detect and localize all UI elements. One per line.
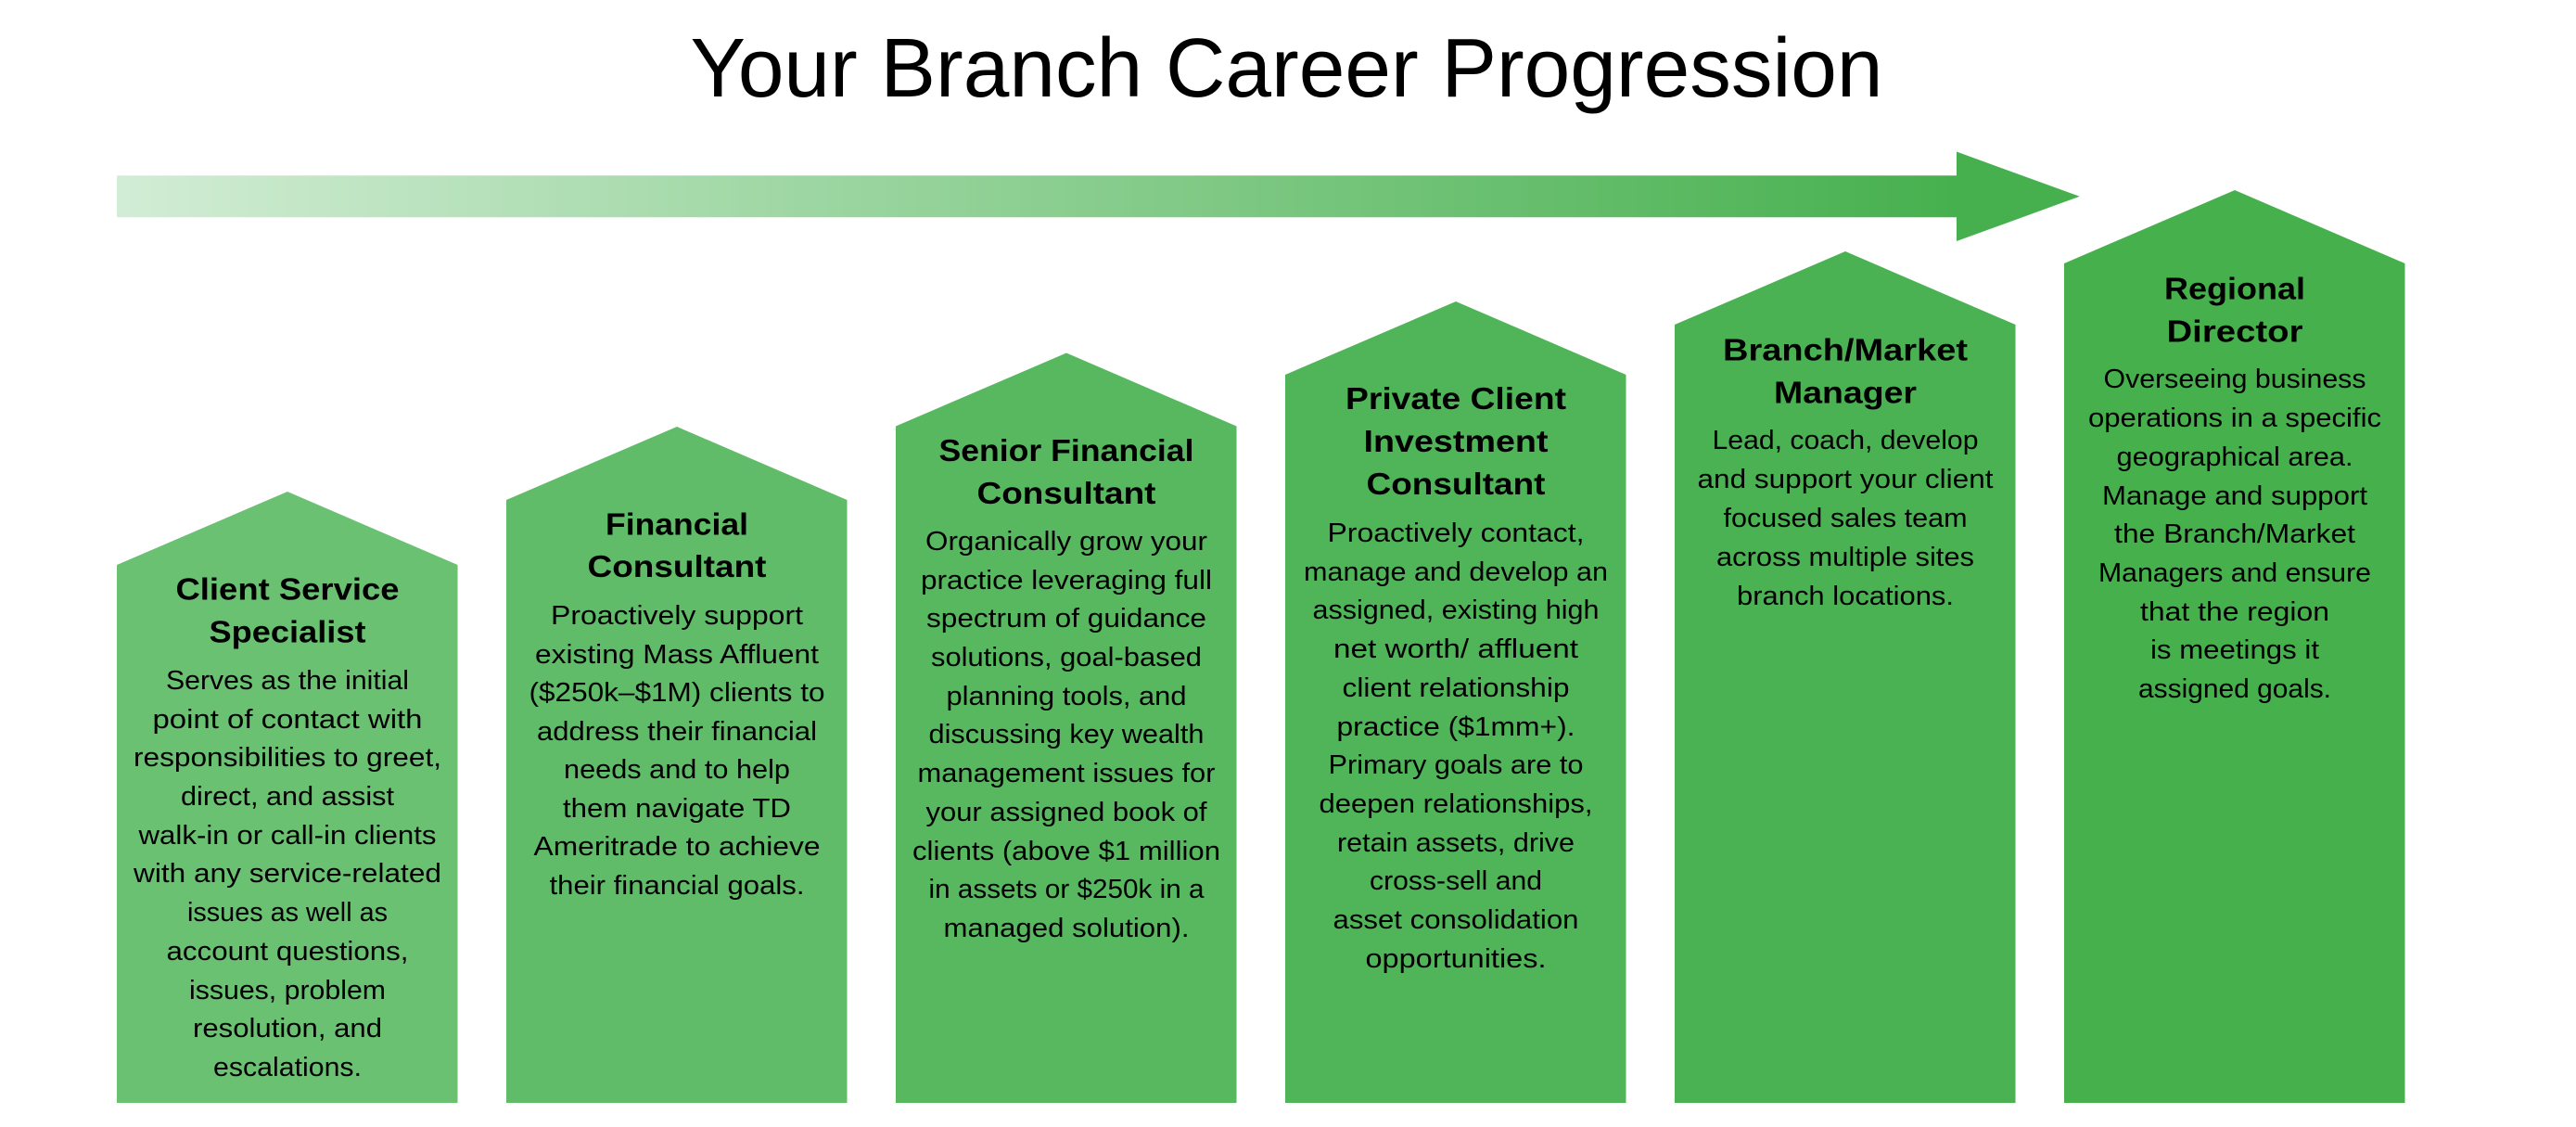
description: Proactively support (551, 601, 803, 631)
heading: Senior Financial (938, 433, 1194, 467)
heading: Investment (1363, 424, 1549, 458)
description: Managers and ensure (2098, 558, 2371, 588)
card shape (117, 492, 458, 1103)
description: Serves as the initial (166, 666, 409, 696)
description: spectrum of guidance (926, 604, 1206, 634)
description: operations in a specific (2088, 403, 2381, 433)
description: with any service-related (133, 859, 441, 889)
panel: Senior Financial Consultant (896, 352, 1237, 1103)
card shape (1285, 301, 1626, 1103)
description: Lead, coach, develop (1712, 426, 1979, 455)
card shape (506, 427, 848, 1103)
description: needs and to help (564, 755, 790, 785)
description: in assets or $250k in a (929, 875, 1205, 904)
heading: Regional (2164, 271, 2305, 306)
description: Primary goals are to (1328, 750, 1584, 780)
heading: Consultant (977, 476, 1155, 510)
card shape (1675, 251, 2016, 1103)
description (2088, 365, 2381, 704)
description: asset consolidation (1333, 905, 1578, 935)
description: Proactively contact, (1328, 519, 1584, 548)
description (133, 666, 441, 1082)
description: retain assets, drive (1337, 828, 1575, 858)
panel: Financial Consultant (506, 427, 848, 1103)
heading (2164, 271, 2305, 349)
card shape (2064, 190, 2405, 1103)
description: across multiple sites (1716, 543, 1974, 572)
description: existing Mass Affluent (535, 640, 819, 670)
description: point of contact with (152, 705, 423, 735)
heading (1345, 381, 1566, 501)
card shape (896, 352, 1237, 1103)
heading: Client Service (176, 571, 399, 607)
description: discussing key wealth (929, 720, 1204, 749)
description: escalations. (213, 1053, 362, 1082)
heading: Manager (1774, 375, 1917, 410)
description: ($250k–$1M) clients to (529, 678, 825, 708)
heading (588, 506, 766, 583)
description: responsibilities to greet, (134, 743, 441, 773)
heading: Financial (606, 506, 748, 542)
heading: Consultant (588, 549, 766, 583)
description: issues, problem (189, 976, 386, 1005)
description: them navigate TD (563, 794, 791, 824)
description: issues as well as (187, 898, 388, 928)
description: their financial goals. (549, 871, 805, 901)
description: the Branch/Market (2114, 519, 2355, 549)
heading (938, 433, 1194, 510)
heading: Branch/Market (1723, 332, 1968, 367)
description: direct, and assist (181, 782, 394, 812)
description: planning tools, and (946, 682, 1187, 711)
description: focused sales team (1723, 504, 1968, 533)
description: address their financial (537, 717, 817, 747)
arrow: career progression direction (117, 152, 2080, 241)
description: walk-in or call-in clients (137, 821, 437, 851)
description: that the region (2140, 597, 2329, 627)
description: is meetings it (2150, 635, 2319, 665)
heading (176, 571, 399, 649)
description: solutions, goal-based (931, 643, 1202, 672)
description: Ameritrade to achieve (534, 832, 820, 862)
description: and support your client (1697, 465, 1994, 494)
description: management issues for (918, 759, 1216, 788)
description: account questions, (167, 937, 408, 967)
description: managed solution). (944, 914, 1189, 943)
description: Overseeing business (2103, 365, 2366, 394)
description: Organically grow your (925, 527, 1207, 557)
heading: Private Client (1345, 381, 1566, 416)
description: cross-sell and (1370, 866, 1542, 896)
description (1697, 426, 1994, 611)
heading: Specialist (210, 614, 366, 649)
description: manage and develop an (1304, 557, 1608, 587)
heading (1723, 332, 1968, 410)
panel: Regional Director (2064, 190, 2405, 1103)
heading: Consultant (1367, 467, 1545, 501)
description: geographical area. (2116, 442, 2353, 472)
description: Manage and support (2102, 481, 2367, 511)
panel: Private Client Investment Consultant (1285, 301, 1626, 1103)
description (1304, 519, 1608, 974)
description: assigned goals. (2138, 674, 2331, 704)
description: clients (above $1 million (912, 837, 1220, 866)
heading: Director (2166, 314, 2303, 349)
description: your assigned book of (925, 798, 1207, 827)
description: net worth/ affluent (1333, 634, 1578, 664)
panel: Client Service Specialist (117, 492, 458, 1103)
description: branch locations. (1737, 582, 1954, 611)
description (529, 601, 825, 901)
description: resolution, and (193, 1014, 382, 1044)
description: practice leveraging full (921, 566, 1212, 596)
description (912, 527, 1220, 943)
description: deepen relationships, (1319, 789, 1593, 819)
description: opportunities. (1365, 944, 1547, 974)
title: Your Branch Career Progression (690, 22, 1882, 115)
description: assigned, existing high (1313, 596, 1599, 625)
description: client relationship (1343, 673, 1569, 703)
panel: Branch/Market Manager (1675, 251, 2016, 1103)
description: practice ($1mm+). (1337, 712, 1575, 742)
